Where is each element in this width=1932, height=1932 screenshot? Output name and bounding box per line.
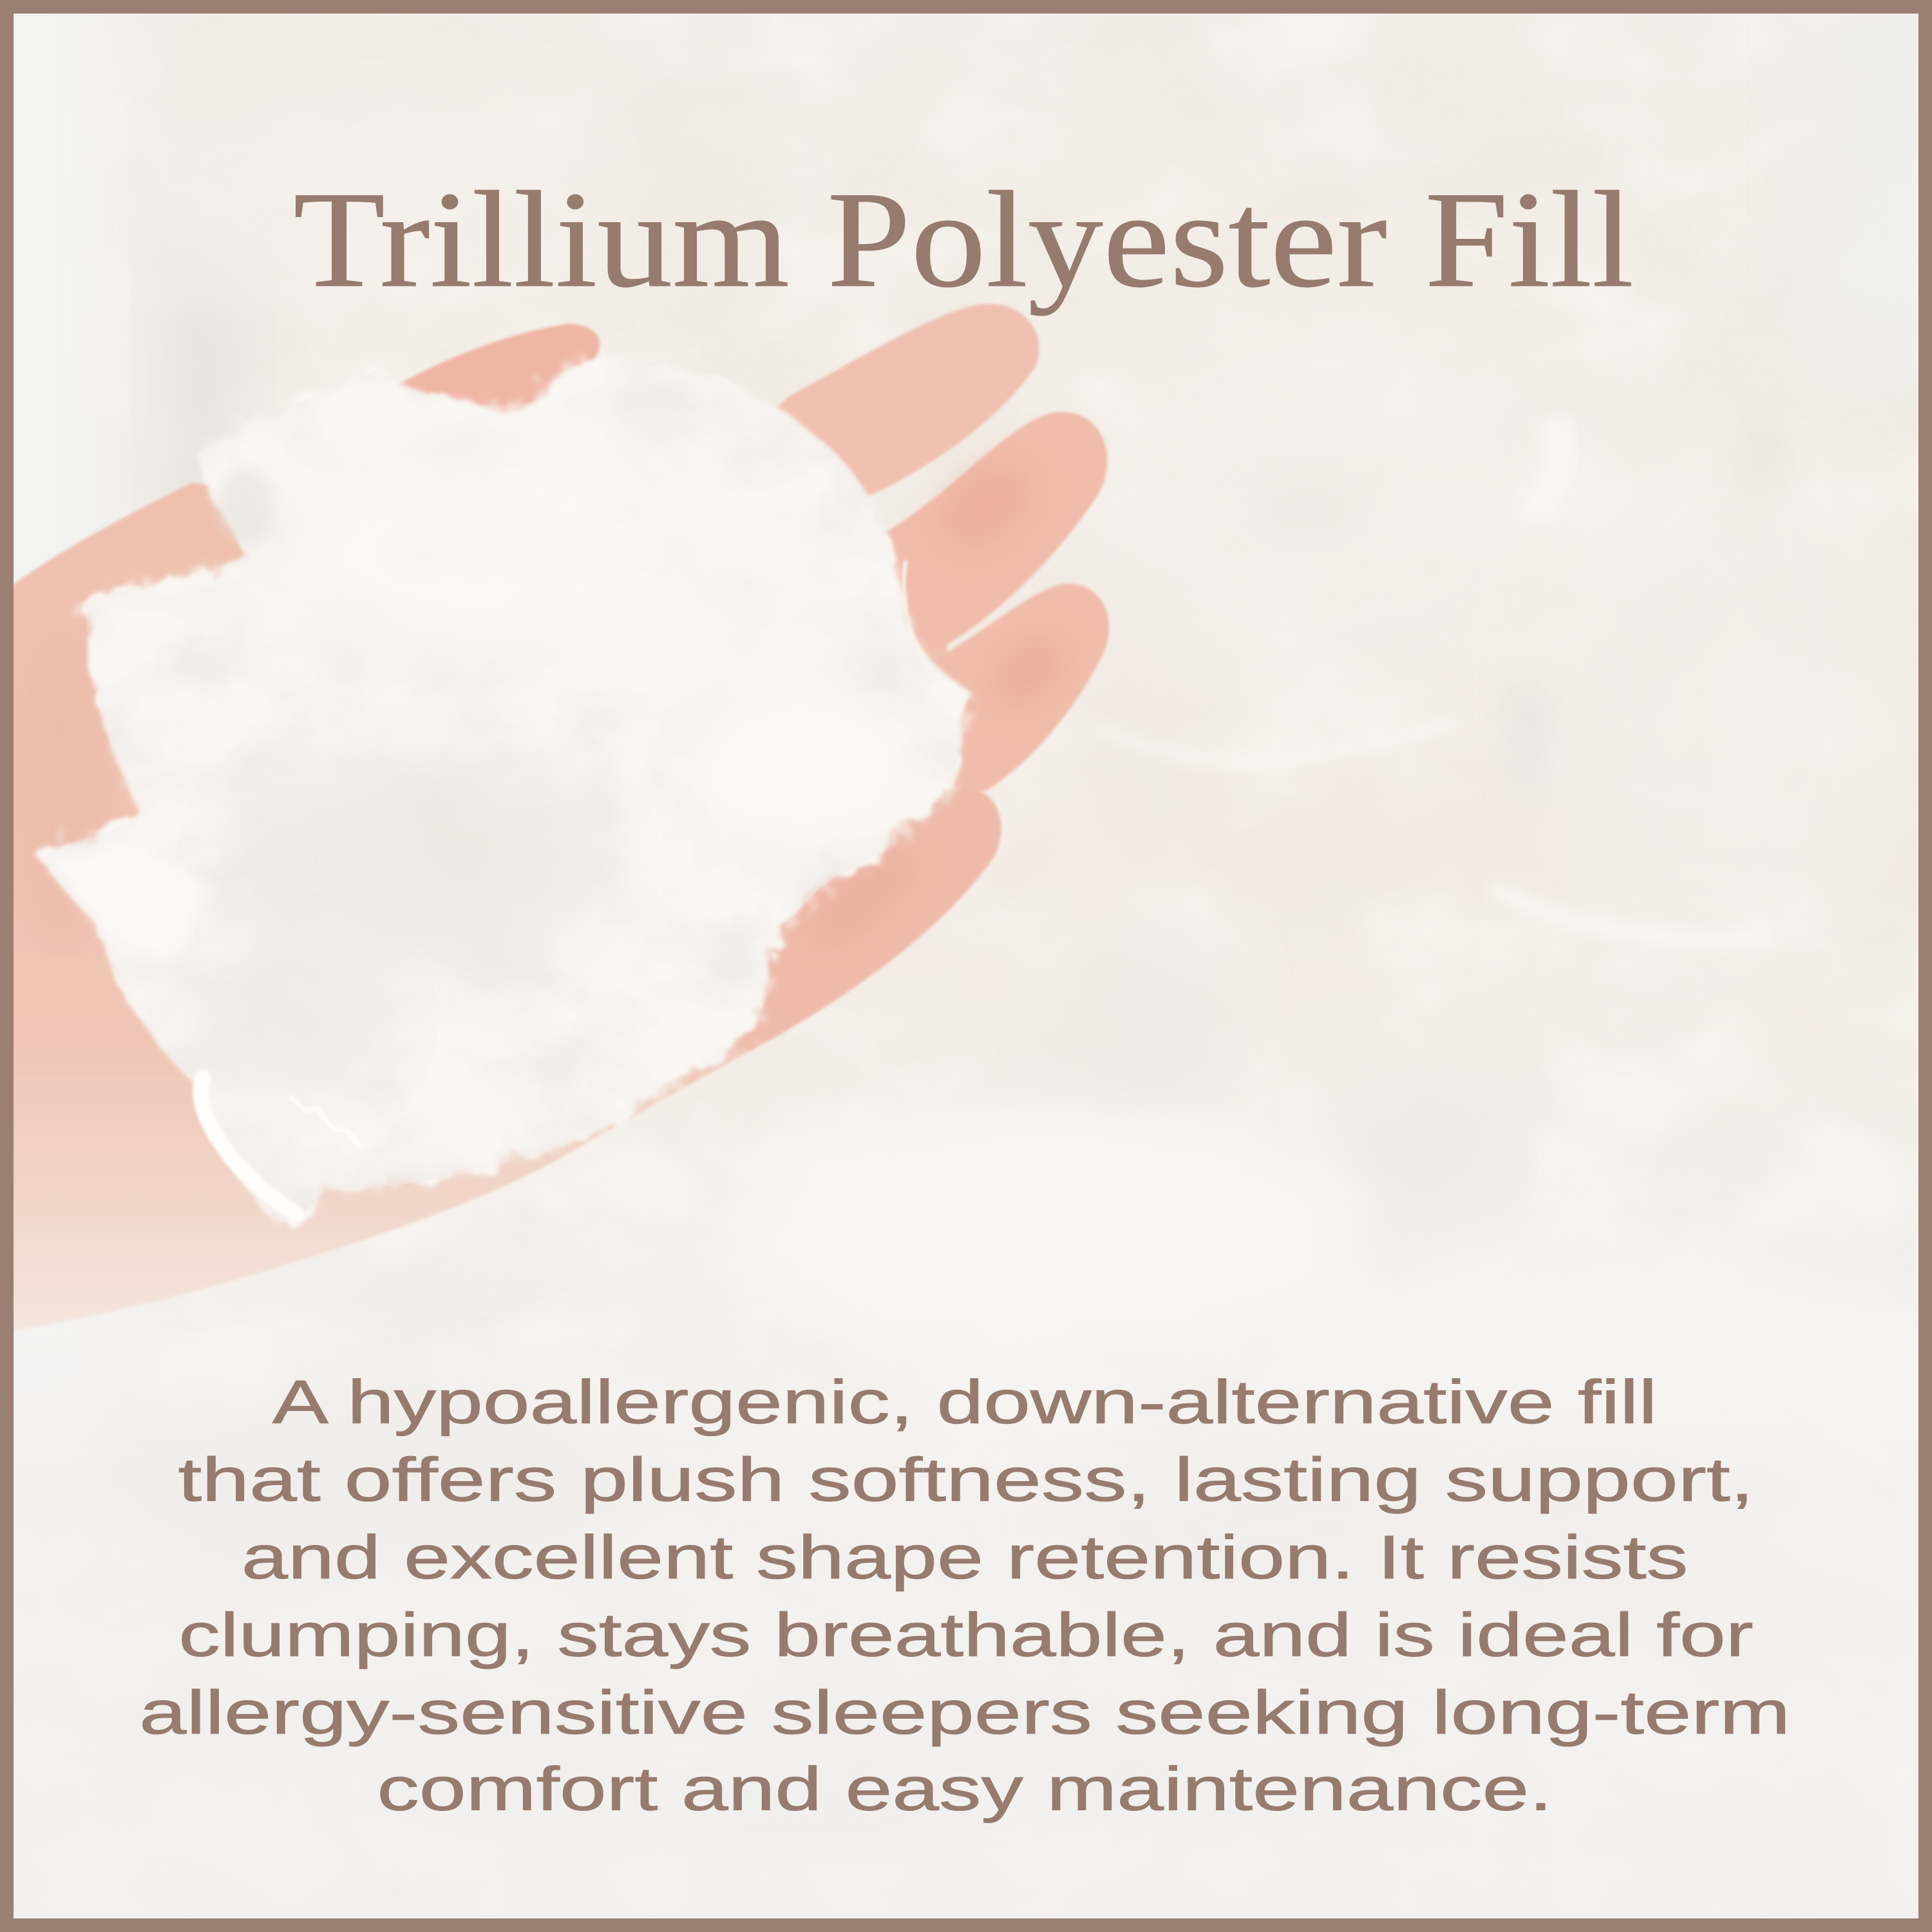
title: Trillium Polyester Fill	[293, 164, 1634, 316]
description text	[139, 1368, 1790, 1824]
fill wisps	[41, 357, 971, 1222]
description text: A hypoallergenic, down-alternative fill	[272, 1368, 1657, 1437]
skin shading	[925, 448, 1046, 563]
description text: that offers plush softness, lasting support,	[178, 1445, 1754, 1514]
hand palm	[0, 483, 973, 1333]
photo: hand holding fill	[0, 304, 1109, 1333]
hand little finger	[665, 789, 1001, 1050]
hand middle finger	[850, 412, 1107, 665]
hand ring finger	[887, 583, 1109, 801]
description text: clumping, stays breathable, and is ideal for	[178, 1600, 1754, 1669]
background: blurred polyester fibres	[14, 15, 1780, 1406]
hand thumb	[370, 324, 600, 425]
description text: and excellent shape retention. It resists	[242, 1523, 1688, 1592]
description text: allergy-sensitive sleepers seeking long-term	[139, 1678, 1790, 1747]
fill body	[41, 357, 971, 1222]
fill shading	[0, 320, 1010, 1257]
fill clump	[0, 320, 1010, 1257]
description text: comfort and easy maintenance.	[377, 1755, 1553, 1824]
hand index finger	[727, 304, 1039, 530]
